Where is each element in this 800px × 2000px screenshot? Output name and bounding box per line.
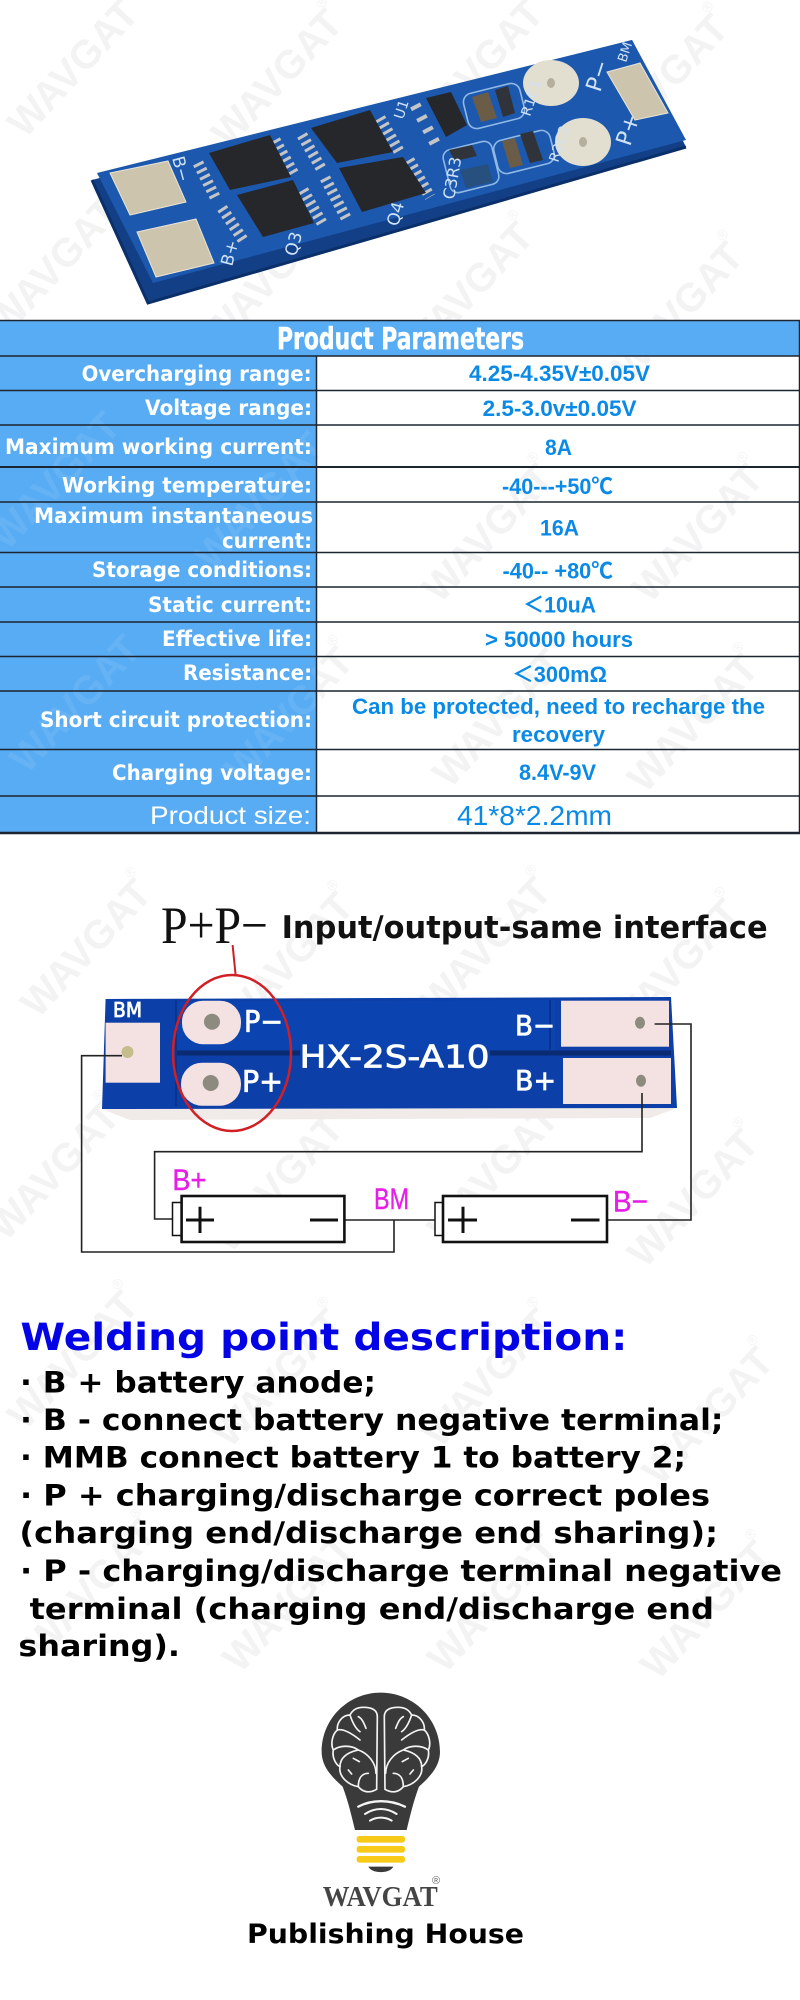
board silkscreen: B− — [167, 154, 193, 184]
battery 1 — [172, 1196, 344, 1242]
magenta terminal labels — [172, 1164, 648, 1219]
watermark pattern: WAVGAT — [203, 1, 351, 155]
watermark pattern: WAVGAT — [604, 234, 752, 388]
watermark pattern: WAVGAT — [419, 1526, 567, 1680]
row labels: Short circuit protection: — [40, 708, 312, 732]
row values: 4.25-4.35V±0.05V — [469, 361, 650, 386]
watermark pattern: WAVGAT — [601, 891, 749, 1045]
WAVGAT wordmark: WAVGAT — [323, 1881, 438, 1913]
magenta terminal labels: BM — [374, 1183, 409, 1216]
welding point description list — [18, 1366, 782, 1663]
watermark pattern: WAVGAT — [394, 214, 542, 368]
board silkscreen: P− — [582, 57, 616, 95]
board silkscreen labels: HX-2S-A10 — [300, 1040, 490, 1076]
watermark pattern: ® — [743, 1330, 762, 1349]
watermark pattern: WAVGAT — [17, 1511, 165, 1665]
row values: > 50000 hours — [485, 627, 633, 652]
product photo: protection board — [92, 40, 686, 303]
watermark tint on table: WAVGAT — [2, 627, 149, 781]
board silkscreen labels: P+ — [242, 1065, 283, 1099]
watermark pattern: ® — [323, 630, 342, 649]
diagram heading: P+P− — [161, 897, 268, 955]
watermark pattern: WAVGAT — [204, 1106, 352, 1260]
watermark tint on table: WAVGAT — [187, 424, 334, 578]
watermark pattern: WAVGAT — [634, 1339, 782, 1493]
board silkscreen labels — [113, 998, 556, 1099]
watermark pattern: ® — [303, 192, 322, 211]
magenta terminal labels: B− — [613, 1186, 648, 1219]
watermark pattern: ® — [108, 620, 127, 639]
watermark pattern: ® — [523, 447, 542, 466]
board silkscreen: C3R3 — [439, 155, 465, 201]
row labels: Overcharging range: — [82, 362, 312, 386]
watermark pattern: ® — [713, 225, 732, 244]
row values: -40-- +80℃ — [502, 558, 613, 584]
watermark pattern: WAVGAT — [204, 1301, 352, 1455]
watermark pattern: ® — [741, 1524, 760, 1543]
row labels: Static current: — [148, 593, 312, 617]
watermark pattern: ® — [293, 417, 312, 436]
silkscreen outlines — [441, 82, 556, 194]
watermark pattern: ® — [523, 1292, 542, 1311]
watermark pattern: WAVGAT — [589, 6, 737, 160]
row labels: Maximum instantaneous — [34, 504, 313, 528]
watermark pattern: WAVGAT — [424, 641, 572, 795]
welding point description list: · B + battery anode; — [20, 1366, 376, 1400]
row values: 41*8*2.2mm — [457, 800, 612, 831]
table heading: Product Parameters — [277, 322, 524, 357]
welding point description list: · B - connect battery negative terminal; — [20, 1403, 724, 1437]
row labels: Storage conditions: — [92, 558, 312, 582]
round pads — [523, 60, 611, 166]
logo: WAVGAT Publishing House — [247, 1693, 524, 1950]
row labels: Product size: — [150, 802, 311, 830]
Publishing House: Publishing House — [247, 1919, 524, 1950]
row values: Can be protected, need to recharge the — [352, 694, 765, 719]
board silkscreen labels: B− — [515, 1009, 555, 1042]
diagram heading: Input/output-same interface — [282, 910, 768, 946]
watermark pattern: ® — [121, 862, 140, 881]
watermark pattern: ® — [323, 1517, 342, 1536]
watermark pattern: ® — [710, 882, 729, 901]
board silkscreen labels: B+ — [515, 1064, 556, 1097]
watermark pattern: WAVGAT — [414, 456, 562, 610]
welding point description heading: Welding point description: — [20, 1316, 627, 1359]
watermark pattern: WAVGAT — [419, 1096, 567, 1250]
watermark pattern: WAVGAT — [0, 629, 147, 783]
row values — [352, 361, 765, 831]
red callout line and circle — [173, 945, 291, 1131]
row values: ＜300mΩ — [512, 662, 607, 687]
watermark pattern: WAVGAT — [214, 884, 362, 1038]
small components — [449, 86, 543, 188]
row values: 16A — [540, 516, 579, 540]
watermark pattern: ® — [323, 875, 342, 894]
watermark pattern: WAVGAT — [214, 1526, 362, 1680]
watermark pattern: ® — [313, 1097, 332, 1116]
board silkscreen: R2C2 — [547, 124, 573, 164]
pad holes — [122, 1014, 646, 1091]
diagram heading — [161, 897, 768, 955]
watermark pattern: WAVGAT — [619, 1121, 767, 1275]
watermark tint on table — [0, 404, 364, 791]
parameters table — [0, 320, 800, 833]
row labels — [5, 362, 313, 830]
watermark tint on table: WAVGAT — [217, 637, 364, 791]
board silkscreen: BM — [616, 40, 636, 64]
row values: ＜10uA — [523, 592, 596, 618]
row labels: Charging voltage: — [112, 761, 312, 785]
board silkscreen: B+ — [218, 238, 244, 268]
watermark pattern: ® — [503, 205, 522, 224]
magenta terminal labels: B+ — [172, 1164, 206, 1197]
solder pads — [110, 63, 668, 277]
row labels: Resistance: — [183, 661, 312, 685]
board silkscreen: P+ — [612, 111, 646, 149]
row values: 2.5-3.0v±0.05V — [483, 396, 637, 421]
watermark pattern: ® — [89, 1085, 108, 1104]
board pads — [106, 1001, 671, 1106]
row labels: Working temperature: — [62, 474, 312, 498]
watermark pattern: WAVGAT — [619, 646, 767, 800]
watermark pattern: WAVGAT — [632, 1533, 780, 1687]
table grid — [0, 320, 800, 833]
welding point description list: · P - charging/discharge terminal negative — [20, 1554, 782, 1588]
watermark pattern: ® — [733, 447, 752, 466]
watermark pattern: WAVGAT — [194, 201, 342, 355]
watermark pattern: WAVGAT — [412, 869, 560, 1023]
watermark pattern: ® — [88, 397, 107, 416]
board silkscreen: Q4 — [384, 200, 409, 228]
icon: light bulb with brain — [322, 1693, 440, 1872]
battery 2 — [435, 1196, 607, 1242]
watermark pattern: ® — [528, 1517, 547, 1536]
watermark pattern: ® — [533, 632, 552, 651]
watermark pattern: WAVGAT — [184, 426, 332, 580]
board silkscreen: Q3 — [282, 230, 307, 258]
board silkscreen: R1C1 — [519, 78, 545, 118]
row labels: current: — [222, 529, 312, 553]
board silkscreen labels: BM — [113, 998, 142, 1022]
watermark pattern: WAVGAT — [624, 456, 772, 610]
welding point description list: · MMB connect battery 1 to battery 2; — [20, 1441, 686, 1475]
watermark pattern: ® — [313, 1292, 332, 1311]
welding point description list: (charging end/discharge end sharing); — [19, 1516, 718, 1550]
row values: -40---+50℃ — [502, 474, 613, 499]
watermark pattern: WAVGAT — [414, 1301, 562, 1455]
watermark pattern: WAVGAT — [214, 639, 362, 793]
board silkscreen — [167, 40, 646, 268]
watermark pattern: ® — [89, 180, 108, 199]
row labels: Maximum working current: — [5, 435, 312, 459]
welding point description list: · P + charging/discharge correct poles — [20, 1479, 710, 1513]
row labels: Effective life: — [162, 627, 312, 651]
watermark pattern: ® — [126, 1502, 145, 1521]
watermark pattern: ® — [108, 1274, 127, 1293]
row values: 8.4V-9V — [519, 760, 596, 785]
row labels: Voltage range: — [145, 396, 312, 420]
blue circuit board — [102, 997, 677, 1109]
registered mark: ® — [432, 1875, 440, 1887]
watermark pattern: ® — [521, 860, 540, 879]
wiring diagram — [82, 897, 768, 1252]
board silkscreen: U1 — [392, 98, 413, 121]
row values: 8A — [545, 435, 572, 460]
watermark pattern: ® — [728, 1112, 747, 1131]
board shadow — [102, 1108, 677, 1120]
table cell fills — [0, 321, 800, 833]
connection wires — [82, 1024, 691, 1252]
row values: recovery — [512, 722, 606, 747]
welding point description list: terminal (charging end/discharge end — [30, 1592, 714, 1626]
welding point description list: sharing). — [18, 1629, 180, 1663]
watermark pattern: WAVGAT — [12, 871, 160, 1025]
chip pins — [198, 105, 436, 243]
watermark pattern: ® — [528, 1087, 547, 1106]
chips — [209, 92, 467, 237]
watermark pattern: WAVGAT — [0, 1283, 147, 1437]
board silkscreen labels: P− — [244, 1005, 283, 1039]
watermark pattern: ® — [728, 637, 747, 656]
